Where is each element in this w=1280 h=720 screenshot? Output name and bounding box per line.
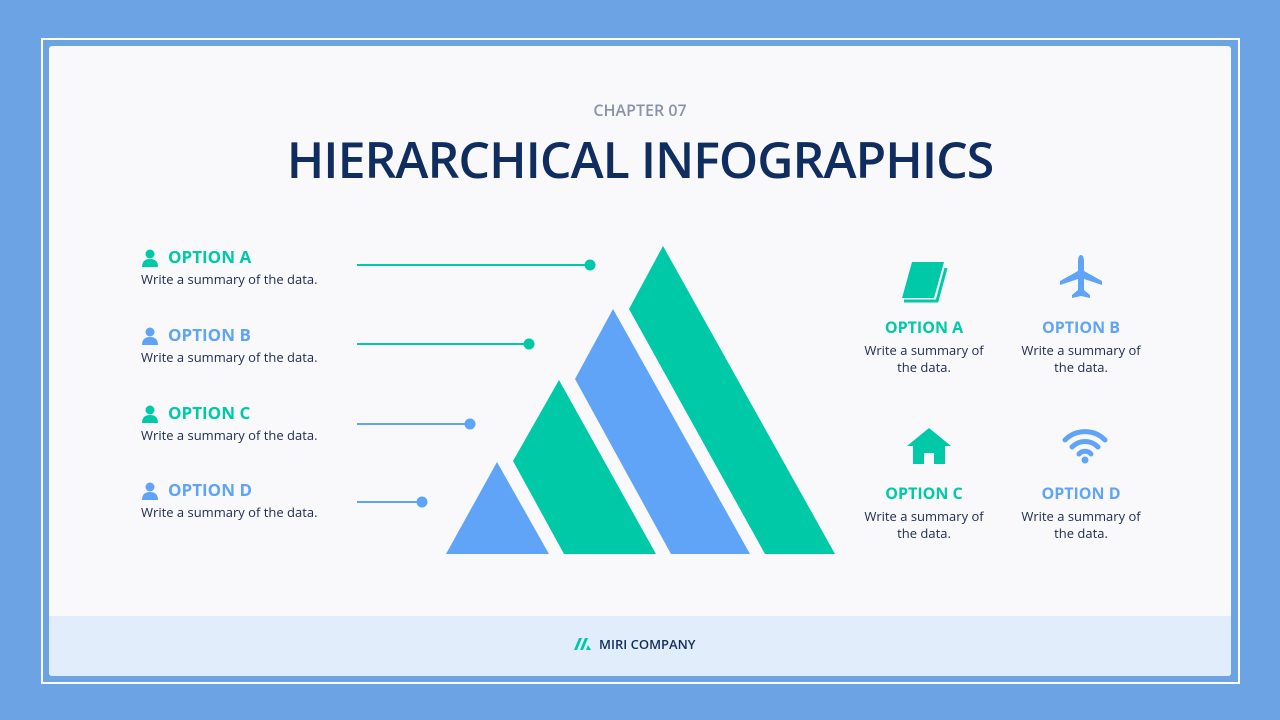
- right option D: the data.: [1054, 524, 1108, 542]
- right option B: the data.: [1054, 358, 1108, 376]
- pyramid: [446, 246, 835, 554]
- right option D: OPTION D: [1041, 482, 1121, 504]
- title: HIERARCHICAL INFOGRAPHICS: [287, 125, 993, 193]
- right option B: OPTION B: [1042, 316, 1120, 338]
- left option A: OPTION A: [168, 245, 251, 268]
- left option B: Write a summary of the data.: [141, 348, 317, 366]
- right option A: [864, 316, 984, 376]
- left option C: [141, 401, 317, 444]
- right option A: the data.: [897, 358, 951, 376]
- right option C: OPTION C: [885, 482, 963, 504]
- icon: book: [902, 262, 948, 302]
- icon: plane: [1060, 255, 1102, 298]
- right option B: [1021, 316, 1142, 376]
- footer logo and company: MIRI COMPANY: [599, 635, 696, 653]
- left option A: [141, 245, 317, 288]
- left option D: Write a summary of the data.: [141, 503, 317, 521]
- chapter label: CHAPTER 07: [593, 99, 687, 121]
- right option C: the data.: [897, 524, 951, 542]
- icon: wifi: [1062, 429, 1108, 464]
- right option C: Write a summary of: [864, 507, 984, 525]
- connector lines: [357, 260, 596, 508]
- pyramid chart with connector lines: [357, 246, 835, 554]
- icon: house: [907, 428, 951, 464]
- right option D: [1021, 482, 1142, 542]
- left option B: [141, 323, 317, 366]
- left option B: OPTION B: [168, 323, 251, 346]
- right option A: OPTION A: [885, 316, 963, 338]
- footer: [49, 616, 1231, 676]
- right option B: Write a summary of: [1021, 341, 1141, 359]
- left option D: [141, 478, 317, 521]
- right option D: Write a summary of: [1021, 507, 1141, 525]
- right option A: Write a summary of: [864, 341, 984, 359]
- left option C: OPTION C: [168, 401, 250, 424]
- left option C: Write a summary of the data.: [141, 426, 317, 444]
- right option C: [864, 482, 984, 542]
- left option D: OPTION D: [168, 478, 252, 501]
- left option A: Write a summary of the data.: [141, 270, 317, 288]
